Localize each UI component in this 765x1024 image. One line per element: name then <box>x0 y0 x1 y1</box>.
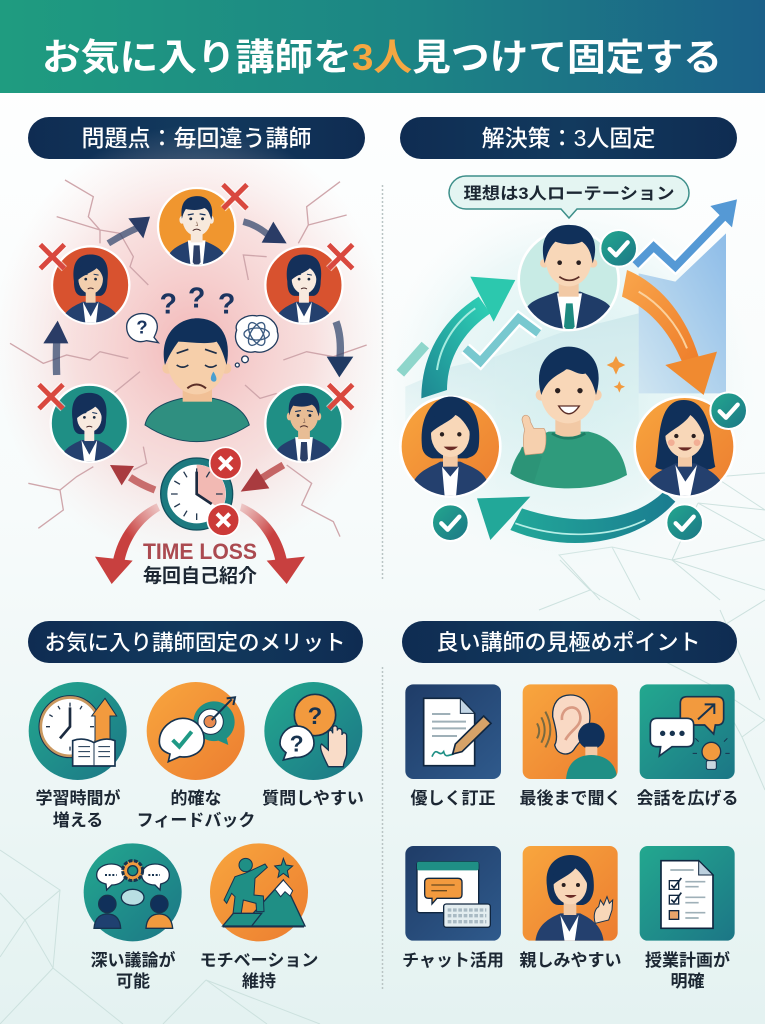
x mark lower left <box>39 385 63 409</box>
label: motivation: モチベーション <box>200 951 318 970</box>
cracks <box>10 180 367 537</box>
speech bubble with question <box>127 314 158 343</box>
question marks: ? <box>160 288 177 320</box>
icon: target feedback <box>147 682 245 780</box>
confused student <box>145 318 249 442</box>
panel: problem <box>0 117 393 587</box>
label: deep discussion: 深い議論が <box>90 950 176 970</box>
divider top <box>382 185 384 580</box>
label: precise feedback: フィードバック <box>137 811 255 830</box>
label: expand conversation: 会話を広げる <box>636 789 738 808</box>
panel: how to identify good teachers <box>402 621 738 991</box>
teal rotation arrow bottom <box>477 492 675 543</box>
x mark top <box>223 185 247 209</box>
teal rotation arrow left <box>421 277 515 398</box>
arrows between teachers <box>43 217 353 377</box>
merit icons <box>29 682 362 941</box>
red arrows around clock <box>95 465 305 584</box>
clock icon <box>161 447 242 536</box>
teacher avatar: upper right <box>265 246 343 326</box>
heading: identification points <box>402 621 737 663</box>
heading: identification points: 良い講師の見極めポイント <box>436 630 701 655</box>
label: gentle correction: 優しく訂正 <box>410 789 496 808</box>
teacher right <box>635 397 735 497</box>
label: deep discussion: 可能 <box>116 971 150 991</box>
label: chat usage: チャット活用 <box>402 951 504 970</box>
label: motivation: 維持 <box>242 972 276 991</box>
time loss label: TIME LOSS <box>143 539 257 564</box>
check badges <box>432 230 747 541</box>
panel: solution <box>396 117 746 543</box>
heading: solution <box>400 117 737 159</box>
problem illustration <box>10 180 367 584</box>
label: precise feedback: 的確な <box>170 789 222 808</box>
panel: merits <box>28 621 364 991</box>
icon: chat usage <box>405 846 501 941</box>
heading: merits: お気に入り講師固定のメリット <box>44 631 346 655</box>
sparkles <box>607 356 625 393</box>
point icons <box>405 684 735 942</box>
x mark upper left <box>40 245 64 269</box>
question marks <box>160 282 235 320</box>
icon: climbing mountain <box>210 843 308 941</box>
divider bottom <box>382 667 384 990</box>
teacher avatar: lower right <box>265 385 343 465</box>
icon: expanding conversation <box>640 684 735 779</box>
label: more study time: 増える <box>53 810 103 830</box>
teacher top <box>519 225 619 333</box>
orange rotation arrow <box>622 270 717 395</box>
red glow <box>0 125 393 565</box>
rising chart background <box>382 197 755 570</box>
label: friendly: 親しみやすい <box>520 951 622 970</box>
icon: question and hand <box>264 682 362 780</box>
background network pattern <box>0 473 765 1024</box>
teacher avatar: top <box>158 188 235 268</box>
heading: solution: 解決策：3人固定 <box>482 125 655 151</box>
heading: problem: 問題点：毎回違う講師 <box>82 125 312 151</box>
label: clear lesson plan: 明確 <box>670 972 704 991</box>
icon: friendly teacher <box>523 846 618 942</box>
icon: clock and book <box>29 682 127 780</box>
x mark upper right <box>329 245 353 269</box>
icon: listening ear <box>523 684 618 780</box>
speech bubble: ideal rotation: 理想は3人ローテーション <box>464 184 674 203</box>
label: listen to the end: 最後まで聞く <box>520 788 622 808</box>
icon: discussion <box>84 843 182 941</box>
label: clear lesson plan: 授業計画が <box>645 950 730 970</box>
teacher left <box>400 397 500 497</box>
teacher avatar: upper left <box>52 246 129 326</box>
speech bubble: ideal rotation <box>449 176 689 218</box>
icon: question and hand: ? <box>290 730 304 756</box>
icon: clear lesson plan <box>640 846 735 941</box>
teacher avatar: lower left <box>51 385 128 465</box>
label: more study time: 学習時間が <box>36 788 120 808</box>
header banner <box>0 0 765 93</box>
question marks: ? <box>188 282 205 314</box>
title: お気に入り講師を 3人見つけて固定する <box>42 37 722 78</box>
thought bubble <box>235 315 278 367</box>
question marks: ? <box>218 288 235 320</box>
speech bubble with question: ? <box>136 316 148 337</box>
heading: merits <box>28 621 363 663</box>
x mark lower right <box>329 385 353 409</box>
self introduction label: 毎回自己紹介 <box>143 565 257 587</box>
icon: question and hand: ? <box>308 703 322 730</box>
happy student with thumbs up <box>510 347 627 488</box>
label: easy to ask: 質問しやすい <box>262 789 364 808</box>
icon: gentle correction <box>405 684 501 779</box>
solution illustration <box>396 199 746 543</box>
heading: problem <box>28 117 365 159</box>
